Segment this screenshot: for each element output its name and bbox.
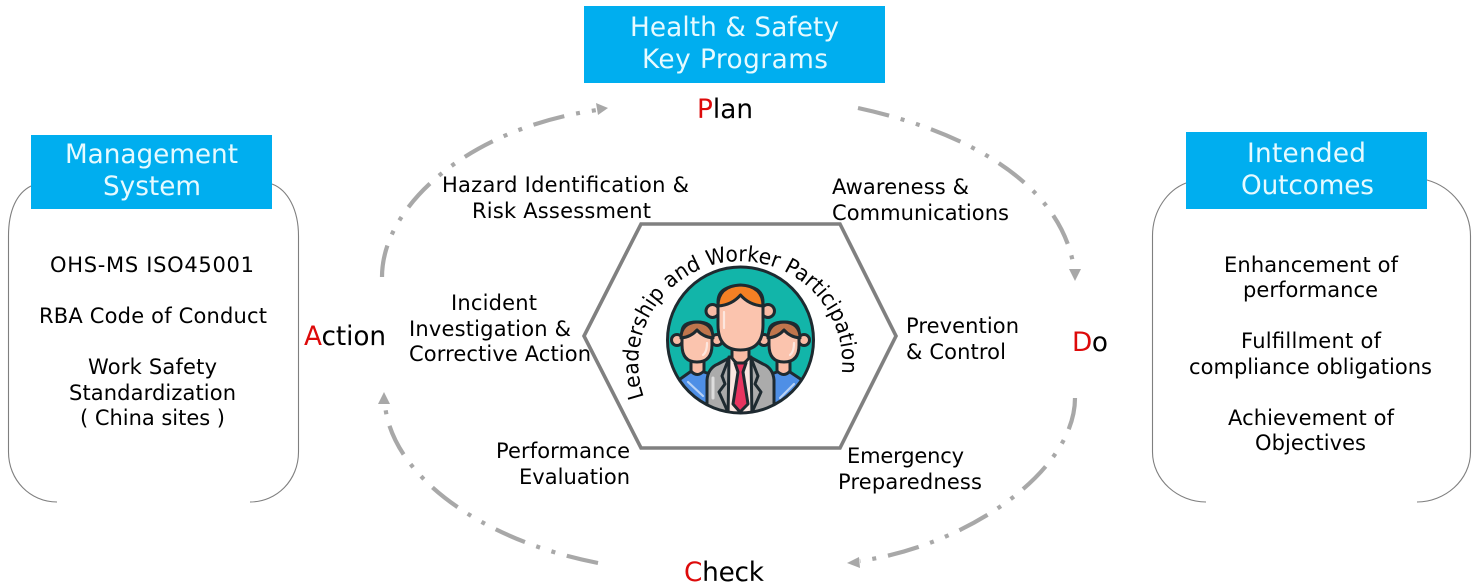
text: hazard identification and risk assessment — [442, 173, 689, 223]
heading: intended outcomes: Intended — [1247, 139, 1366, 169]
text: prevention and control: & Control — [906, 340, 1006, 364]
text block: management system list: Standardization — [69, 381, 236, 405]
text block: intended outcomes list: Enhancement of — [1224, 253, 1399, 277]
text block: intended outcomes list: performance — [1243, 278, 1378, 302]
label: plan: Plan — [697, 95, 753, 125]
text block: intended outcomes list: Achievement of — [1228, 406, 1395, 430]
text: emergency preparedness: Emergency — [847, 444, 964, 468]
heading: intended outcomes: Outcomes — [1241, 171, 1374, 201]
heading: health and safety key programs — [584, 6, 885, 83]
text block: management system list: RBA Code of Conduct — [39, 304, 267, 328]
text: performance evaluation: Performance — [496, 439, 630, 463]
text block: intended outcomes list: compliance obligations — [1189, 355, 1432, 379]
panel: management system — [8, 135, 298, 502]
label: action: Action — [304, 322, 386, 352]
heading: management system — [31, 135, 272, 209]
hexagon — [584, 224, 896, 448]
arrow: action to plan — [382, 103, 608, 277]
text block: management system list: OHS-MS ISO45001 — [50, 253, 254, 277]
text: emergency preparedness: Preparedness — [838, 470, 982, 494]
heading: intended outcomes — [1186, 132, 1427, 209]
text block: management system list — [39, 253, 267, 430]
text: incident investigation and corrective action: Investigation & — [409, 317, 571, 341]
curved text: leadership and worker participation: Leadership and Worker Participation — [622, 245, 857, 400]
text: prevention and control — [906, 314, 1019, 364]
text: performance evaluation — [496, 439, 630, 489]
label: do: Do — [1072, 328, 1108, 358]
panel outline: intended outcomes — [1152, 180, 1470, 502]
text block: intended outcomes list — [1189, 253, 1432, 455]
text: prevention and control: Prevention — [906, 314, 1019, 338]
text: hazard identification and risk assessment: Risk Assessment — [472, 199, 651, 223]
panel: intended outcomes — [1152, 132, 1470, 502]
text block: management system list: Work Safety — [88, 355, 217, 379]
arrow: do to check — [847, 398, 1075, 568]
icon part: right worker — [758, 320, 811, 402]
heading: health and safety key programs: Health & Safety — [630, 13, 839, 43]
heading: health and safety key programs: Key Programs — [642, 45, 828, 75]
text block: management system list: ( China sites ) — [80, 406, 225, 430]
icon: leadership team — [668, 267, 814, 420]
arrow: plan to do — [858, 108, 1081, 281]
arrow: check to action — [378, 392, 598, 563]
text: hazard identification and risk assessment: Hazard Identification & — [442, 173, 689, 197]
icon part: leader — [706, 285, 774, 420]
heading: management system: Management — [65, 140, 238, 170]
panel outline: management system — [8, 184, 298, 502]
text: incident investigation and corrective action — [409, 291, 591, 366]
text: incident investigation and corrective action: Incident — [451, 291, 537, 315]
text block: intended outcomes list: Fulfillment of — [1241, 329, 1382, 353]
text: awareness and communications: Awareness & — [832, 175, 969, 199]
heading: management system: System — [103, 172, 201, 202]
text: awareness and communications — [832, 175, 1009, 225]
text: performance evaluation: Evaluation — [519, 465, 630, 489]
text: awareness and communications: Communications — [832, 201, 1009, 225]
text: emergency preparedness — [838, 444, 982, 494]
text: incident investigation and corrective action: Corrective Action — [409, 342, 591, 366]
icon part: left worker — [670, 320, 722, 402]
text block: intended outcomes list: Objectives — [1255, 431, 1366, 455]
